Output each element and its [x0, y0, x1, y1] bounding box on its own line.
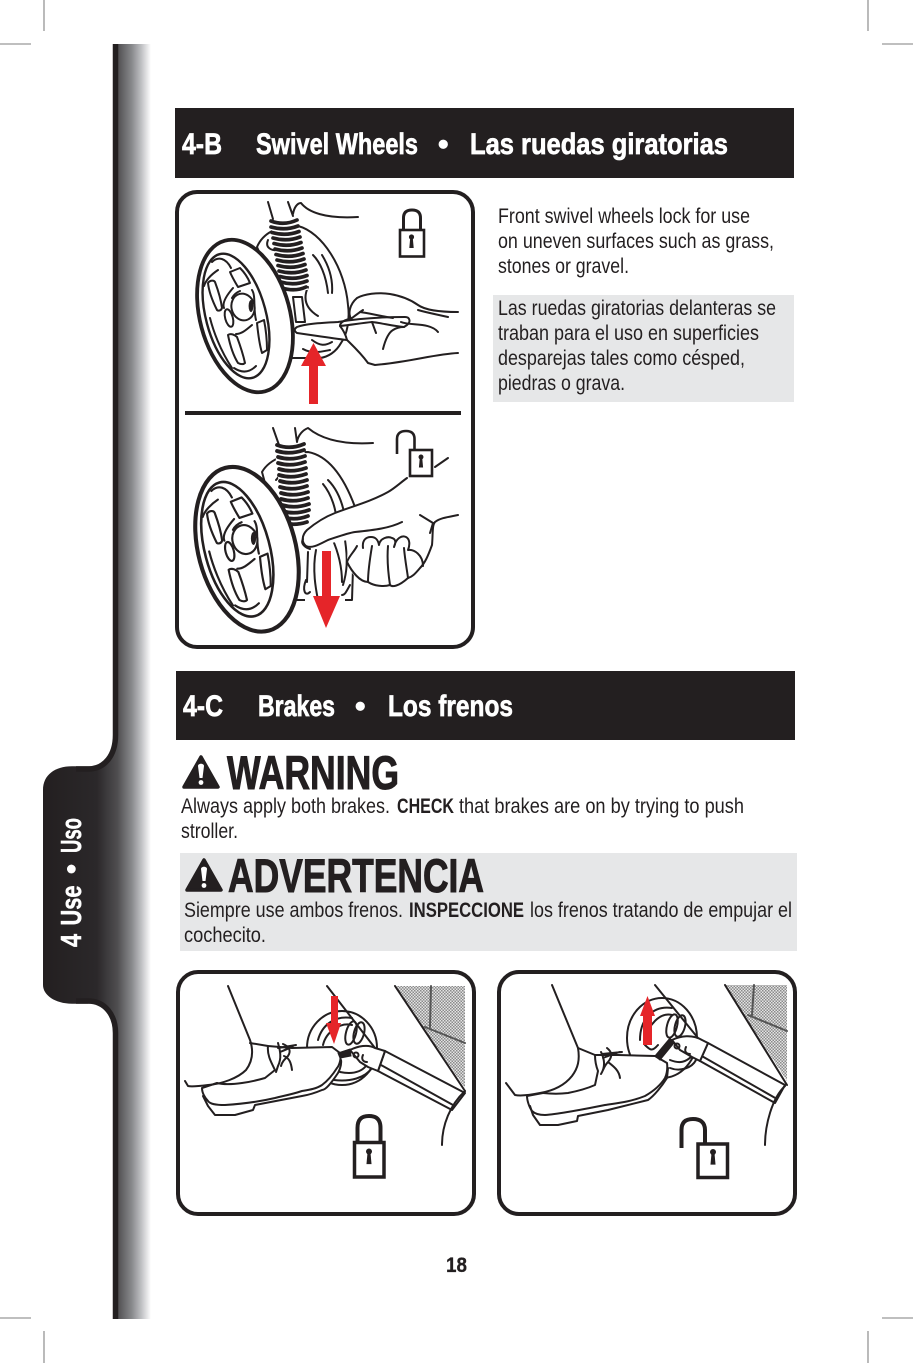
- text: swivel wheels English: stones or gravel.: [498, 254, 629, 278]
- shoe: [202, 1043, 341, 1115]
- text: swivel wheels Spanish: [493, 295, 794, 402]
- side tab: 4 Use / Uso: Uso: [56, 818, 88, 853]
- warning block English: Always apply both brakes.: [181, 794, 390, 818]
- spring: [274, 444, 310, 526]
- illustration: unlocked swivel wheel with hand: [178, 428, 458, 643]
- warning block Spanish: cochecito.: [184, 923, 266, 947]
- text: swivel wheels Spanish: desparejas tales como césped,: [498, 346, 745, 370]
- warning block English: stroller.: [181, 819, 238, 843]
- icon: locked padlock: [400, 210, 424, 256]
- warning block Spanish: los frenos tratando de empujar el: [530, 898, 792, 922]
- warning block English: [181, 746, 744, 843]
- text: swivel wheels Spanish: Las ruedas giratorias delanteras se: [498, 296, 776, 320]
- panel: brake unlocked: [499, 972, 795, 1214]
- heading bar: 4-B Swivel Wheels: 4-B: [182, 128, 222, 161]
- heading bar: 4-B Swivel Wheels: [175, 108, 794, 178]
- side tab: 4 Use / Uso: •: [56, 864, 88, 874]
- icon: unlocked padlock: [397, 431, 432, 476]
- text: swivel wheels English: Front swivel wheels lock for use: [498, 204, 750, 228]
- warning block Spanish: INSPECCIONE: [409, 898, 524, 922]
- divider: [185, 411, 461, 415]
- panel: swivel wheel illustrations: [177, 192, 473, 647]
- hand pushing tab: [302, 470, 458, 586]
- warning block English: CHECK: [397, 794, 454, 818]
- illustration: locked swivel wheel with hand: [181, 202, 458, 403]
- shoe: [527, 1048, 668, 1125]
- warning block English: that brakes are on by trying to push: [459, 794, 744, 818]
- spring: [270, 220, 308, 290]
- page number: 18: [446, 1254, 467, 1277]
- arrow: down: [326, 996, 341, 1044]
- heading bar: 4-C Brakes: Brakes: [258, 690, 335, 723]
- heading bar: 4-B Swivel Wheels: •: [438, 128, 449, 161]
- heading bar: 4-C Brakes: 4-C: [183, 690, 223, 723]
- warning block Spanish: Siempre use ambos frenos.: [184, 898, 403, 922]
- heading bar: 4-C Brakes: Los frenos: [388, 690, 513, 723]
- warning block Spanish: ADVERTENCIA: [228, 849, 484, 902]
- icon: warning triangle: [187, 860, 221, 890]
- warning block English: WARNING: [227, 746, 399, 799]
- text: swivel wheels Spanish: piedras o grava.: [498, 371, 625, 395]
- side tab: 4 Use / Uso: 4: [56, 934, 88, 947]
- icon: warning triangle: [184, 757, 218, 787]
- illustration: foot pressing brake: [185, 986, 465, 1145]
- text: swivel wheels English: [498, 204, 774, 278]
- icon: locked padlock: [354, 1116, 384, 1177]
- arrow: up: [301, 343, 326, 404]
- mesh seat fabric: [725, 985, 787, 1085]
- icon: unlocked padlock: [682, 1119, 728, 1178]
- heading bar: 4-C Brakes: •: [355, 690, 366, 723]
- side tab: 4 Use / Uso: Use: [56, 886, 88, 926]
- heading bar: 4-B Swivel Wheels: Swivel Wheels: [256, 128, 418, 161]
- heading bar: 4-C Brakes: [176, 671, 795, 740]
- heading bar: 4-B Swivel Wheels: Las ruedas giratorias: [470, 128, 728, 161]
- mesh seat fabric: [395, 986, 465, 1091]
- side tab: 4 Use / Uso: [43, 44, 151, 1319]
- warning block Spanish: [180, 849, 797, 951]
- text: swivel wheels English: on uneven surfaces such as grass,: [498, 229, 774, 253]
- text: swivel wheels Spanish: traban para el uso en superficies: [498, 321, 759, 345]
- illustration: foot lifting brake: [506, 985, 785, 1145]
- arrow: down: [313, 551, 340, 628]
- arrow: up: [640, 996, 655, 1045]
- panel: brake locked: [178, 972, 474, 1214]
- hand pressing tab: [345, 293, 458, 365]
